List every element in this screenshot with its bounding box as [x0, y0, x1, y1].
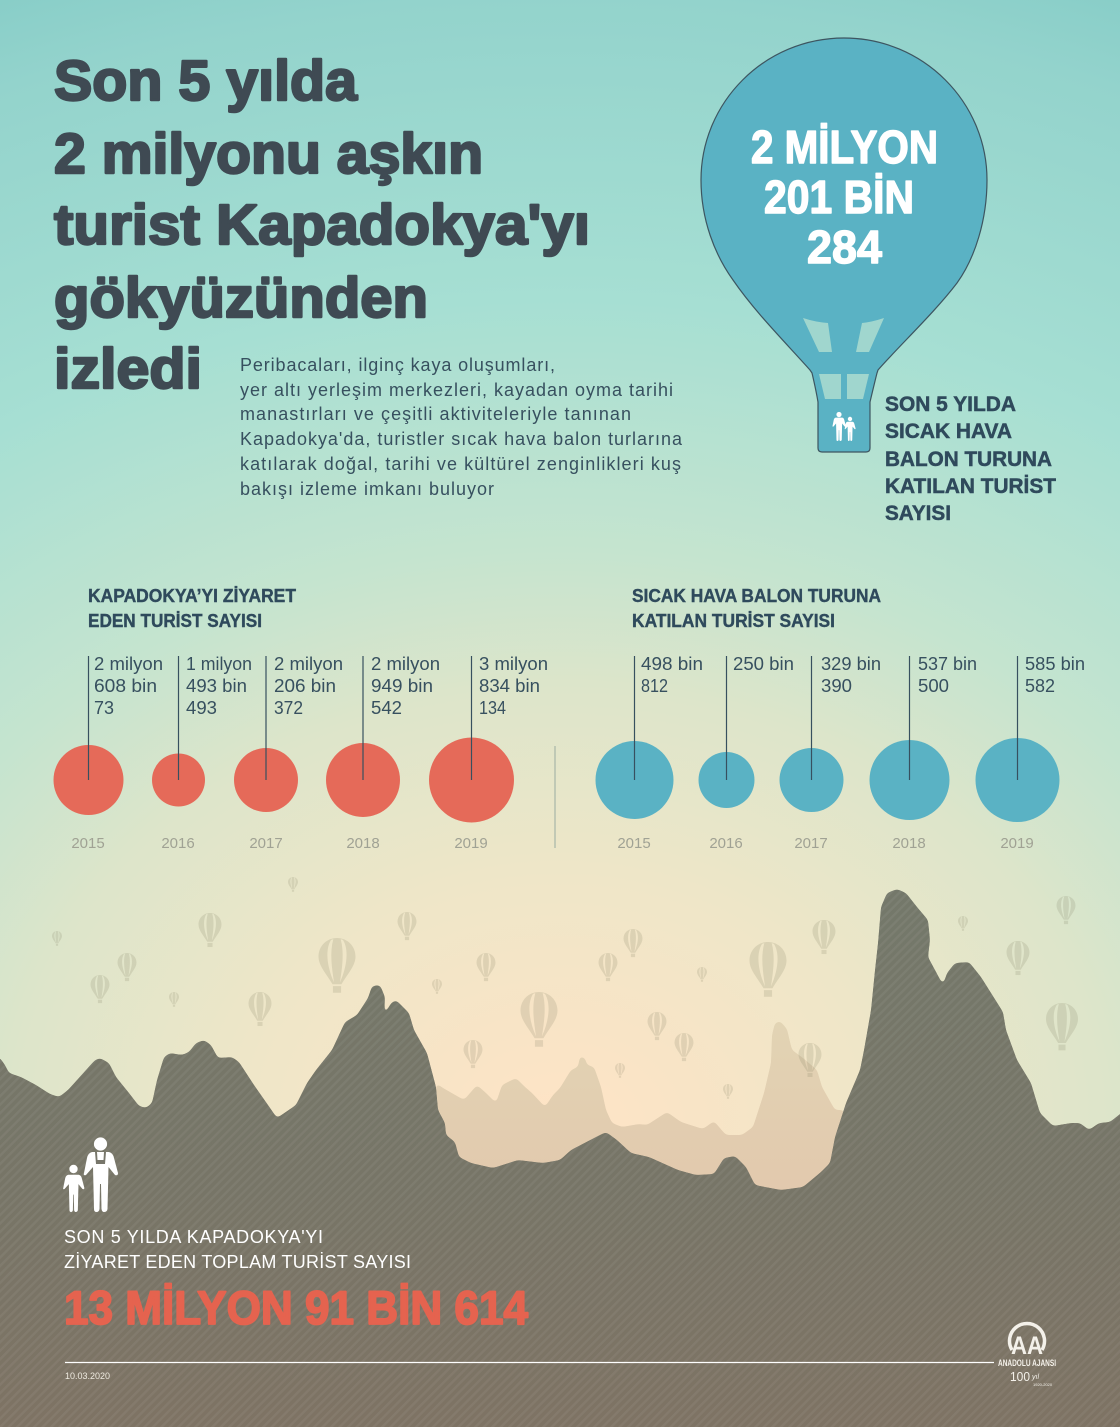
logo: Anadolu Ajansi — [998, 1323, 1056, 1387]
bubble chart: visitors: 949 bin — [371, 676, 433, 696]
heading: visitors — [88, 586, 296, 631]
logo: Anadolu Ajansi: yıl — [1031, 1374, 1039, 1381]
panel: balloon tour participants per year — [596, 586, 1085, 852]
title: izledi — [54, 337, 202, 401]
bubble chart: visitors: 2017 — [249, 835, 283, 852]
heading: visitors: KAPADOKYA’YI ZİYARET — [88, 586, 296, 606]
bubble chart: participants: 2015 — [617, 835, 651, 852]
bubble chart: visitors: 372 — [274, 698, 303, 718]
total visitors number: 13 MİLYON 91 BİN 614 — [64, 1281, 528, 1334]
balloon total number: 2 MİLYON — [751, 121, 938, 173]
date: 10.03.2020 — [65, 1371, 110, 1382]
balloon caption — [885, 393, 1056, 525]
intro paragraph: katılarak doğal, tarihi ve kültürel zenginlikleri kuş — [240, 454, 681, 474]
balloon total number: 201 BİN — [764, 171, 914, 223]
heading: participants: SICAK HAVA BALON TURUNA — [632, 586, 881, 606]
bubble chart: participants: 582 — [1025, 676, 1055, 696]
balloon windows — [803, 318, 884, 399]
logo: Anadolu Ajansi: AA — [1011, 1332, 1043, 1360]
title: Son 5 yılda — [54, 49, 358, 113]
bubble chart: visitors: 2019 — [454, 835, 488, 852]
title — [54, 49, 590, 401]
bubble chart: participants: 2019 — [1000, 835, 1034, 852]
bubble chart: visitors: 2 milyon — [94, 654, 163, 674]
distant rock formations — [436, 1022, 843, 1190]
intro paragraph: Kapadokya'da, turistler sıcak hava balon turlarına — [240, 429, 683, 449]
bubble chart: visitors: 73 — [94, 698, 114, 718]
bubble chart: visitors — [54, 654, 548, 852]
title: turist Kapadokya'yı — [54, 193, 590, 257]
balloon caption: SICAK HAVA — [885, 420, 1012, 443]
bubble chart: visitors: 2018 — [346, 835, 380, 852]
bubble chart: visitors: 2015 — [71, 835, 105, 852]
logo: Anadolu Ajansi: ANADOLU AJANSI — [998, 1358, 1056, 1368]
title: gökyüzünden — [54, 266, 428, 330]
logo: Anadolu Ajansi: 100 — [1010, 1369, 1030, 1384]
bubble chart: visitors: 493 bin — [186, 676, 247, 696]
bubble chart: participants: 500 — [918, 676, 949, 696]
bubble chart: participants: 2017 — [794, 835, 828, 852]
bubble chart: participants: 537 bin — [918, 654, 977, 674]
bubble chart: participants: 812 — [641, 676, 668, 696]
balloon caption: BALON TURUNA — [885, 448, 1052, 471]
hot air balloon with total — [701, 38, 987, 452]
balloon total number — [751, 121, 938, 273]
background balloons — [52, 877, 1078, 1099]
bubble chart: participants: 585 bin — [1025, 654, 1085, 674]
logo: Anadolu Ajansi: 1920-2020 — [1033, 1382, 1053, 1387]
intro paragraph: Peribacaları, ilginç kaya oluşumları, — [240, 355, 555, 375]
foreground rock formations — [0, 880, 1120, 1427]
bubble chart: visitors: 3 milyon — [479, 654, 548, 674]
bubble chart: visitors: 2 milyon — [274, 654, 343, 674]
intro paragraph: yer altı yerleşim merkezleri, kayadan oyma tarihi — [240, 380, 673, 400]
balloon envelope and basket — [701, 38, 987, 452]
total visitors label: SON 5 YILDA KAPADOKYA'YI — [64, 1227, 323, 1247]
bubble chart: visitors: 608 bin — [94, 676, 157, 696]
balloon caption: SON 5 YILDA — [885, 393, 1016, 416]
balloon caption: KATILAN TURİST — [885, 475, 1056, 498]
title: 2 milyonu aşkın — [54, 122, 483, 186]
bubble chart: participants: 390 — [821, 676, 852, 696]
bubble chart: visitors: 1 milyon — [186, 654, 252, 674]
bubble chart: visitors: 134 — [479, 698, 506, 718]
total visitors label: ZİYARET EDEN TOPLAM TURİST SAYISI — [64, 1252, 411, 1272]
bubble chart: visitors: 206 bin — [274, 676, 336, 696]
bubble chart: participants: 2016 — [709, 835, 743, 852]
bubble chart: visitors: 2 milyon — [371, 654, 440, 674]
bubble chart: visitors: 542 — [371, 698, 402, 718]
intro paragraph: manastırları ve çeşitli aktiviteleriyle tanınan — [240, 404, 631, 424]
bubble chart: visitors: 493 — [186, 698, 217, 718]
icon: adult and child tourists — [63, 1137, 118, 1212]
heading: visitors: EDEN TURİST SAYISI — [88, 611, 262, 631]
heading: participants: KATILAN TURİST SAYISI — [632, 611, 835, 631]
bubble chart: participants: 498 bin — [641, 654, 703, 674]
bubble chart: participants — [596, 654, 1085, 852]
bubble chart: participants: 2018 — [892, 835, 926, 852]
total visitors label — [64, 1227, 411, 1272]
icon: tourists in basket — [832, 412, 856, 441]
intro paragraph — [240, 355, 683, 499]
balloon total number: 284 — [807, 221, 882, 273]
balloon caption: SAYISI — [885, 502, 951, 525]
bubble chart: visitors: 834 bin — [479, 676, 540, 696]
intro paragraph: bakışı izleme imkanı buluyor — [240, 479, 494, 499]
heading: participants — [632, 586, 881, 631]
bubble chart: participants: 329 bin — [821, 654, 881, 674]
bubble chart: participants: 250 bin — [733, 654, 794, 674]
bubble chart: visitors: 2016 — [161, 835, 195, 852]
panel: visitors per year — [54, 586, 548, 852]
